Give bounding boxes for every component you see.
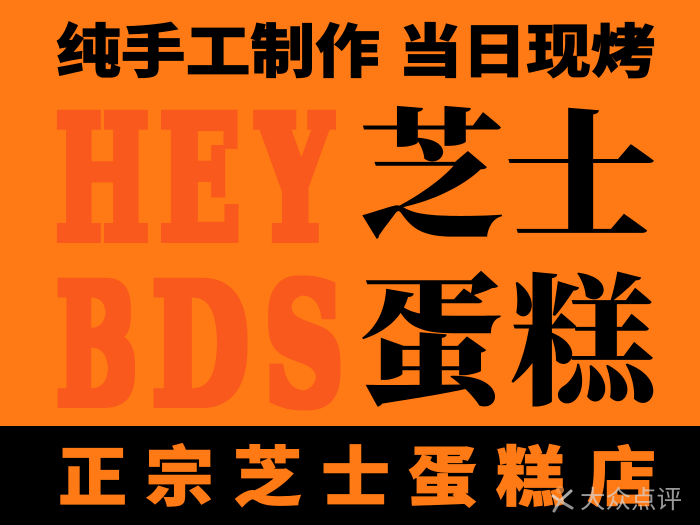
- top slogan: 当日现烤: [398, 20, 655, 85]
- banner text: 宗: [145, 441, 214, 514]
- top slogan: [56, 20, 655, 85]
- icon: watermark logo: [553, 488, 572, 511]
- brand name: HEY BDS: Y: [256, 79, 333, 278]
- brand name: HEY BDS: D: [152, 248, 249, 442]
- banner text: 正: [58, 441, 127, 514]
- brand name: HEY BDS: H: [56, 79, 149, 278]
- brand name: HEY BDS: [56, 79, 344, 442]
- banner text: 芝: [233, 441, 302, 514]
- brand name: HEY BDS: S: [264, 248, 344, 442]
- brand name: HEY BDS: B: [57, 248, 137, 442]
- banner text: 店: [587, 441, 656, 514]
- banner text: 蛋: [408, 441, 477, 514]
- product name: cheesecake: 蛋: [357, 266, 508, 424]
- product name: cheesecake: 芝: [357, 100, 505, 258]
- banner text: 糕: [496, 441, 565, 514]
- top slogan: 纯手工制作: [56, 20, 380, 85]
- watermark text: 大众点评: [580, 486, 682, 514]
- product name: cheesecake: 糕: [510, 266, 670, 424]
- banner text: 士: [321, 441, 390, 514]
- bottom banner: [0, 426, 700, 525]
- brand name: HEY BDS: E: [160, 79, 240, 278]
- product name: cheesecake: [357, 100, 670, 424]
- watermark: [553, 486, 682, 514]
- banner text: [58, 441, 656, 514]
- product name: cheesecake: 士: [503, 100, 659, 258]
